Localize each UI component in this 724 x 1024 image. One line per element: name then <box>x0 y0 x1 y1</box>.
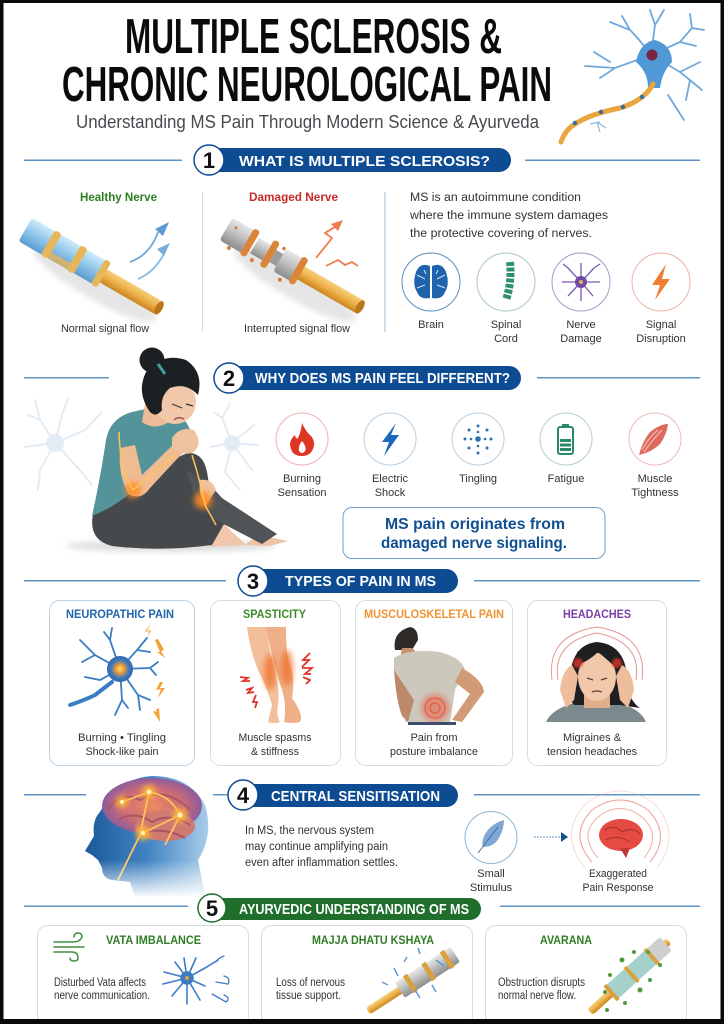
section header 5: 5 <box>206 896 218 921</box>
callout: MS pain origin <box>343 508 605 558</box>
illustration: woman in pain <box>65 348 288 552</box>
icon: tingling <box>452 413 504 485</box>
panel: majja dhatu kshaya <box>262 926 472 1024</box>
icon: fatigue: Fatigue <box>548 473 584 485</box>
panel: vata imbalance: VATA IMBALANCE <box>106 933 201 947</box>
icon: damaged nerve tube <box>363 946 461 1019</box>
icon: neuron with myelinated axon <box>561 10 704 142</box>
panel: neuropathic pain <box>50 600 194 766</box>
section header 4: CENTRAL SENSITISATION <box>271 788 440 805</box>
panel: vata imbalance: nerve communication. <box>54 990 150 1002</box>
icon: brain: Brain <box>418 319 444 331</box>
icon: wind <box>54 933 84 961</box>
icon: burning sensation <box>276 413 328 499</box>
panel: majja dhatu kshaya: MAJJA DHATU KSHAYA <box>312 933 434 947</box>
panel: spasticity: SPASTICITY <box>243 607 306 621</box>
section header 3: 3 <box>247 569 259 594</box>
panel: damaged nerve <box>216 190 371 335</box>
icon: electric shock: Electric <box>372 473 409 485</box>
panel: vata imbalance: Disturbed Vata affects <box>54 977 146 989</box>
text block: MS definition: where the immune system damages <box>409 210 608 222</box>
panel: avarana: AVARANA <box>540 933 592 947</box>
section header 4 <box>24 780 700 810</box>
panel: spasticity <box>210 600 340 766</box>
panel: musculoskeletal pain: Pain from <box>410 732 458 744</box>
section header 3 <box>24 566 700 596</box>
text block: central sensitisation: In MS, the nervous system <box>245 825 374 837</box>
icon: nerve damage: Nerve <box>566 319 596 331</box>
panel: headaches <box>528 600 666 766</box>
text block: central sensitisation <box>245 825 398 869</box>
icon: fatigue <box>540 413 592 485</box>
icon: brain <box>402 253 460 331</box>
text block: central sensitisation: even after inflammation settles. <box>245 857 398 869</box>
icon: spinal cord <box>477 253 535 345</box>
panel: damaged nerve: Damaged Nerve <box>249 190 338 204</box>
icon: feather small stimulus: Small <box>477 868 505 880</box>
panel: musculoskeletal pain: posture imbalance <box>390 746 478 758</box>
panel: vata imbalance <box>38 926 248 1024</box>
icon: electric shock <box>364 413 416 499</box>
icon: exaggerated pain response: Pain Response <box>582 882 654 894</box>
icon: signal disruption: Disruption <box>636 333 686 345</box>
panel: spasticity: & stiffness <box>251 746 299 758</box>
text block: MS definition: the protective covering of nerves. <box>410 228 592 240</box>
icon: muscle tightness: Tightness <box>631 487 679 499</box>
text block: MS definition: MS is an autoimmune condition <box>410 192 581 204</box>
icon: muscle tightness: Muscle <box>638 473 672 485</box>
icon: burning sensation: Sensation <box>278 487 326 499</box>
illustration: background neurons <box>25 398 258 490</box>
subtitle: Understanding MS Pain Through Modern Science & Ayurveda <box>76 112 540 132</box>
icon: nerve damage: Damage <box>560 333 602 345</box>
text block: MS definition <box>409 192 608 240</box>
title <box>62 9 552 112</box>
icon: obstructed nerve tube <box>583 934 675 1019</box>
panel: healthy nerve <box>18 190 170 335</box>
icon: feather small stimulus <box>465 812 517 894</box>
section header 5: AYURVEDIC UNDERSTANDING OF MS <box>239 901 469 918</box>
section header 1: WHAT IS MULTIPLE SCLEROSIS? <box>239 153 490 170</box>
illustration: head with glowing brain <box>85 776 210 898</box>
panel: spasticity: Muscle spasms <box>238 732 312 744</box>
icon: burning sensation: Burning <box>283 473 321 485</box>
section header 2: 2 <box>223 366 235 391</box>
panel: avarana <box>486 926 686 1024</box>
icon: nerve damage <box>552 253 610 345</box>
panel: healthy nerve: Healthy Nerve <box>80 190 157 204</box>
panel: headaches: HEADACHES <box>563 607 631 621</box>
icon: feather small stimulus: Stimulus <box>470 882 513 894</box>
icon: signal disruption <box>632 253 690 345</box>
panel: musculoskeletal pain <box>356 600 512 766</box>
panel: neuropathic pain: Shock-like pain <box>86 746 158 758</box>
panel: musculoskeletal pain: MUSCULOSKELETAL PAIN <box>364 607 504 621</box>
section header 4: 4 <box>237 783 250 808</box>
icon: exaggerated pain response <box>572 791 669 894</box>
icon: spinal cord: Spinal <box>491 319 521 331</box>
section header 1: 1 <box>203 148 215 173</box>
icon: spinal cord: Cord <box>494 333 518 345</box>
panel: majja dhatu kshaya: tissue support. <box>276 990 341 1002</box>
icon: electric shock: Shock <box>375 487 406 499</box>
panel: avarana: normal nerve flow. <box>498 990 576 1002</box>
title: MULTIPLE SCLEROSIS & <box>125 9 502 64</box>
section header 5 <box>24 894 700 922</box>
panel: neuropathic pain: Burning • Tingling <box>78 732 166 744</box>
panel: avarana: Obstruction disrupts <box>498 977 585 989</box>
callout: MS pain origin: MS pain originates from <box>385 516 565 533</box>
panel: neuropathic pain: NEUROPATHIC PAIN <box>66 607 174 621</box>
icon: small neuron <box>163 956 229 1004</box>
text block: central sensitisation: may continue amplifying pain <box>245 841 388 853</box>
panel: healthy nerve: Normal signal flow <box>61 323 149 335</box>
icon: signal disruption: Signal <box>646 319 676 331</box>
icon: muscle tightness <box>629 413 681 499</box>
section header 1 <box>24 145 700 175</box>
arrow <box>534 832 568 842</box>
icon: tingling: Tingling <box>459 473 497 485</box>
section header 3: TYPES OF PAIN IN MS <box>285 573 436 590</box>
icon: exaggerated pain response: Exaggerated <box>589 868 647 880</box>
panel: headaches: Migraines & <box>563 732 622 744</box>
panel: damaged nerve: Interrupted signal flow <box>244 323 350 335</box>
callout: MS pain origin: damaged nerve signaling. <box>381 535 567 552</box>
panel: headaches: tension headaches <box>547 746 637 758</box>
section header 2 <box>24 363 700 393</box>
panel: majja dhatu kshaya: Loss of nervous <box>276 977 345 989</box>
section header 2: WHY DOES MS PAIN FEEL DIFFERENT? <box>255 370 510 387</box>
